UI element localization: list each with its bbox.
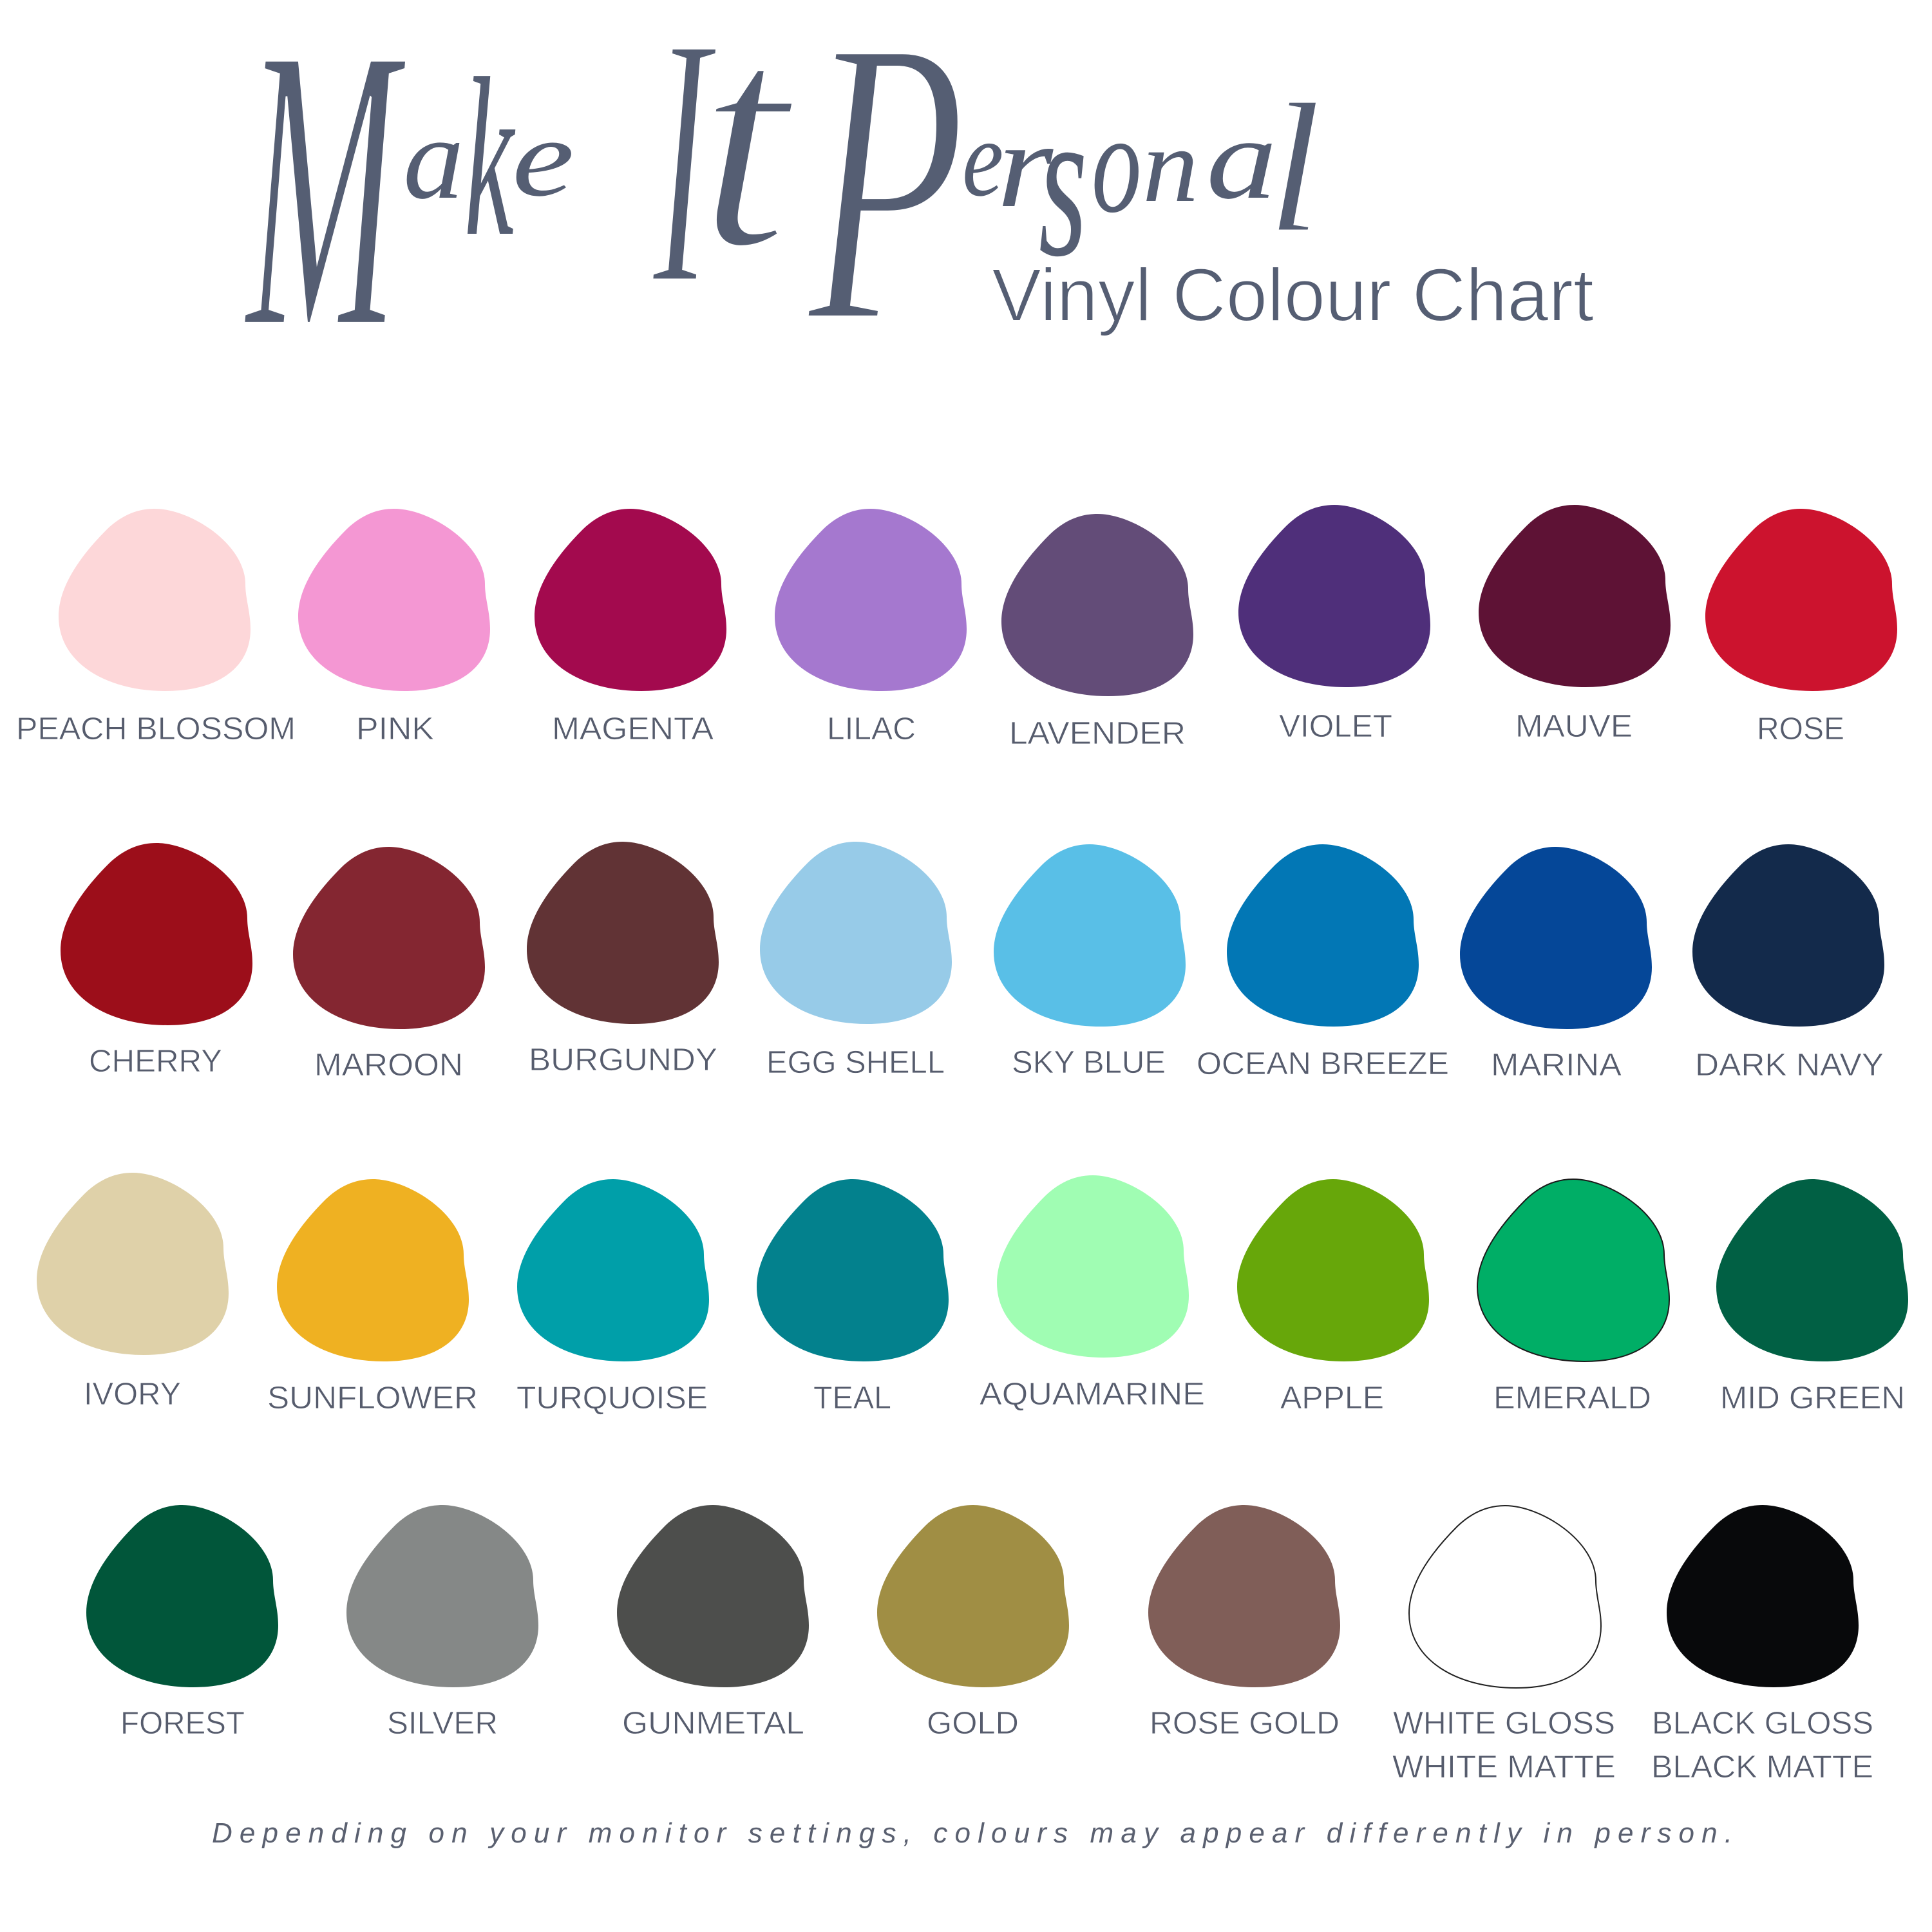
swatch: marina	[1460, 847, 1652, 1083]
swatch: white gloss and matte: WHITE GLOSS	[1393, 1706, 1615, 1741]
swatch: apple	[1237, 1179, 1429, 1416]
swatch: lilac	[775, 509, 967, 746]
swatch: dark navy	[1692, 844, 1884, 1083]
title: a	[403, 94, 464, 223]
title: n	[1142, 107, 1198, 224]
swatch: peach blossom	[16, 509, 296, 746]
swatch: egg shell	[760, 842, 952, 1080]
swatch: magenta	[535, 509, 726, 746]
title: a	[1206, 95, 1277, 223]
swatch: cherry	[61, 843, 252, 1079]
swatch: black gloss and matte: BLACK GLOSS	[1652, 1706, 1873, 1741]
footnote: Depending on your monitor settings, colours may appear differently in person.	[212, 1817, 1732, 1849]
swatch: emerald: EMERALD	[1493, 1381, 1651, 1416]
swatch: white gloss and matte	[1392, 1506, 1616, 1785]
title: e	[512, 96, 574, 220]
swatch: maroon	[293, 847, 485, 1083]
swatch: turquoise: TURQUOISE	[516, 1381, 708, 1416]
swatch: mauve	[1479, 505, 1671, 744]
swatch: pink: PINK	[356, 712, 434, 746]
swatch: black gloss and matte: BLACK MATTE	[1651, 1750, 1873, 1785]
swatch: egg shell: EGG SHELL	[766, 1045, 945, 1080]
swatch: ivory: IVORY	[84, 1377, 181, 1412]
swatch: ivory	[37, 1173, 229, 1412]
swatch: mid green	[1716, 1179, 1908, 1416]
swatch: gunmetal	[617, 1505, 809, 1741]
swatch: magenta: MAGENTA	[552, 712, 714, 746]
swatch: sky blue	[994, 844, 1186, 1080]
swatch: lavender	[1001, 514, 1193, 751]
swatch: pink	[298, 509, 490, 746]
swatch: lavender: LAVENDER	[1009, 716, 1186, 751]
swatch: sunflower	[267, 1179, 478, 1416]
swatch: aquamarine	[980, 1175, 1205, 1412]
swatch: apple: APPLE	[1280, 1381, 1384, 1416]
swatch: rose gold	[1148, 1505, 1340, 1741]
swatch: forest: FOREST	[120, 1706, 245, 1741]
swatch: teal	[757, 1179, 949, 1416]
title: r	[997, 97, 1054, 232]
swatch: dark navy: DARK NAVY	[1695, 1048, 1884, 1083]
swatch: forest	[86, 1505, 278, 1741]
swatch: ocean breeze	[1197, 844, 1449, 1081]
swatch: cherry: CHERRY	[89, 1044, 222, 1079]
swatch: gold	[877, 1505, 1069, 1741]
title: s	[1039, 62, 1087, 301]
swatch: teal: TEAL	[813, 1381, 891, 1416]
swatch: rose: ROSE	[1757, 712, 1844, 746]
swatch: sky blue: SKY BLUE	[1012, 1045, 1166, 1080]
swatch: gunmetal: GUNMETAL	[622, 1706, 804, 1741]
swatch: emerald	[1477, 1179, 1669, 1416]
swatch: mid green: MID GREEN	[1720, 1381, 1905, 1416]
swatch: maroon: MAROON	[314, 1048, 463, 1083]
swatch: sunflower: SUNFLOWER	[267, 1381, 478, 1416]
title: e	[962, 98, 1003, 220]
swatch: mauve: MAUVE	[1515, 709, 1633, 744]
title	[243, 0, 1321, 412]
swatch: violet	[1238, 505, 1430, 744]
title: o	[1092, 83, 1141, 243]
swatch: silver: SILVER	[387, 1706, 498, 1741]
swatch: black gloss and matte	[1651, 1505, 1873, 1785]
swatch: burgundy	[527, 842, 719, 1077]
swatch: burgundy: BURGUNDY	[529, 1043, 717, 1077]
swatch: gold: GOLD	[927, 1706, 1019, 1741]
swatch: ocean breeze: OCEAN BREEZE	[1197, 1046, 1449, 1081]
swatch: silver	[346, 1505, 538, 1741]
title: k	[464, 32, 516, 283]
swatch: rose	[1705, 509, 1897, 746]
swatch: rose gold: ROSE GOLD	[1150, 1706, 1340, 1741]
title: l	[1267, 65, 1321, 271]
swatch: aquamarine: AQUAMARINE	[980, 1377, 1205, 1412]
swatch: peach blossom: PEACH BLOSSOM	[16, 712, 296, 746]
swatch: violet: VIOLET	[1279, 709, 1392, 744]
swatch: turquoise	[516, 1179, 709, 1416]
subtitle: Vinyl Colour Chart	[992, 253, 1594, 337]
swatch: white gloss and matte: WHITE MATTE	[1392, 1750, 1616, 1785]
swatch: marina: MARINA	[1491, 1048, 1622, 1083]
swatch: lilac: LILAC	[827, 712, 916, 746]
